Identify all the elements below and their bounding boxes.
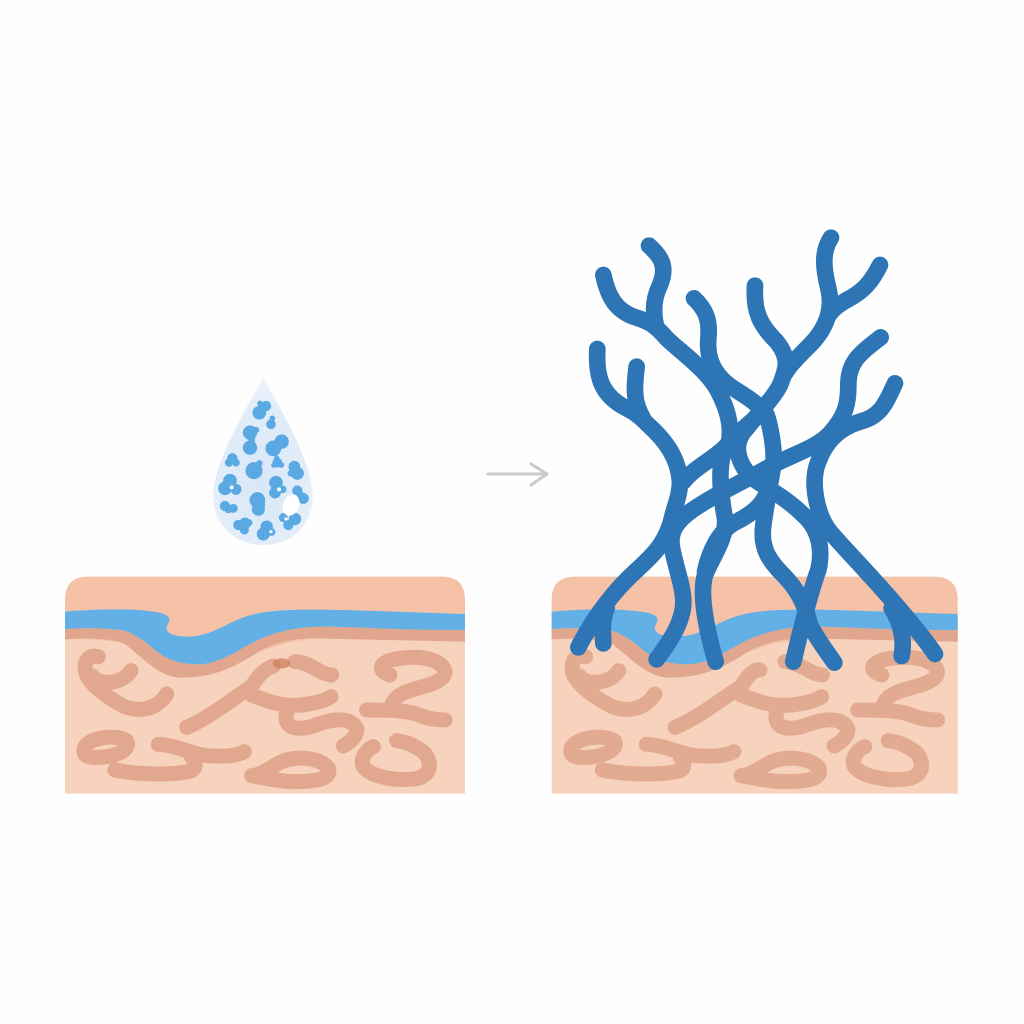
blue moisture band: [65, 609, 465, 664]
molecule clusters: [219, 402, 308, 539]
irritation spot: [273, 658, 290, 668]
collagen fibers: [571, 656, 937, 782]
upper right tree: [738, 238, 880, 662]
blue moisture band: [552, 609, 958, 664]
tan membrane strip: [65, 627, 465, 678]
skin upper layer: [65, 577, 465, 678]
collagen fibers: [84, 656, 445, 782]
upper left tree: [603, 246, 834, 663]
icon: water droplet with molecules: [213, 376, 313, 545]
skin lower layer: [65, 620, 465, 794]
skin upper layer: [552, 577, 958, 678]
white bubbles in clusters: [230, 485, 288, 533]
arrow: [488, 464, 547, 485]
droplet highlight: [280, 492, 302, 518]
droplet body: [213, 376, 313, 545]
tan membrane strip: [552, 627, 958, 678]
right tree: [671, 337, 935, 656]
left lower tree: [578, 349, 683, 659]
skin lower layer: [552, 620, 958, 794]
panel: skin cross-section after: [552, 577, 958, 794]
branching polymer network: [578, 238, 935, 663]
panel: skin cross-section before: [65, 577, 465, 794]
